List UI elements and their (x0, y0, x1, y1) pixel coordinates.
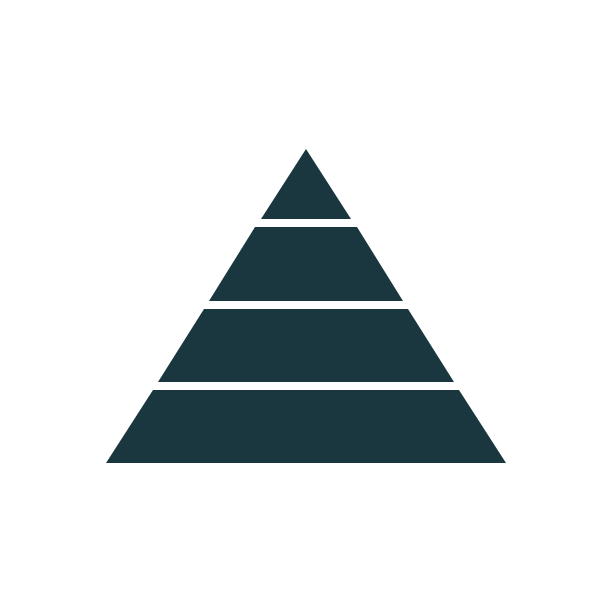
pyramid tier 2 (209, 227, 403, 301)
pyramid tier 4: base (106, 390, 506, 463)
pyramid tier 1: top (261, 149, 351, 219)
pyramid tier 3 (158, 309, 454, 382)
